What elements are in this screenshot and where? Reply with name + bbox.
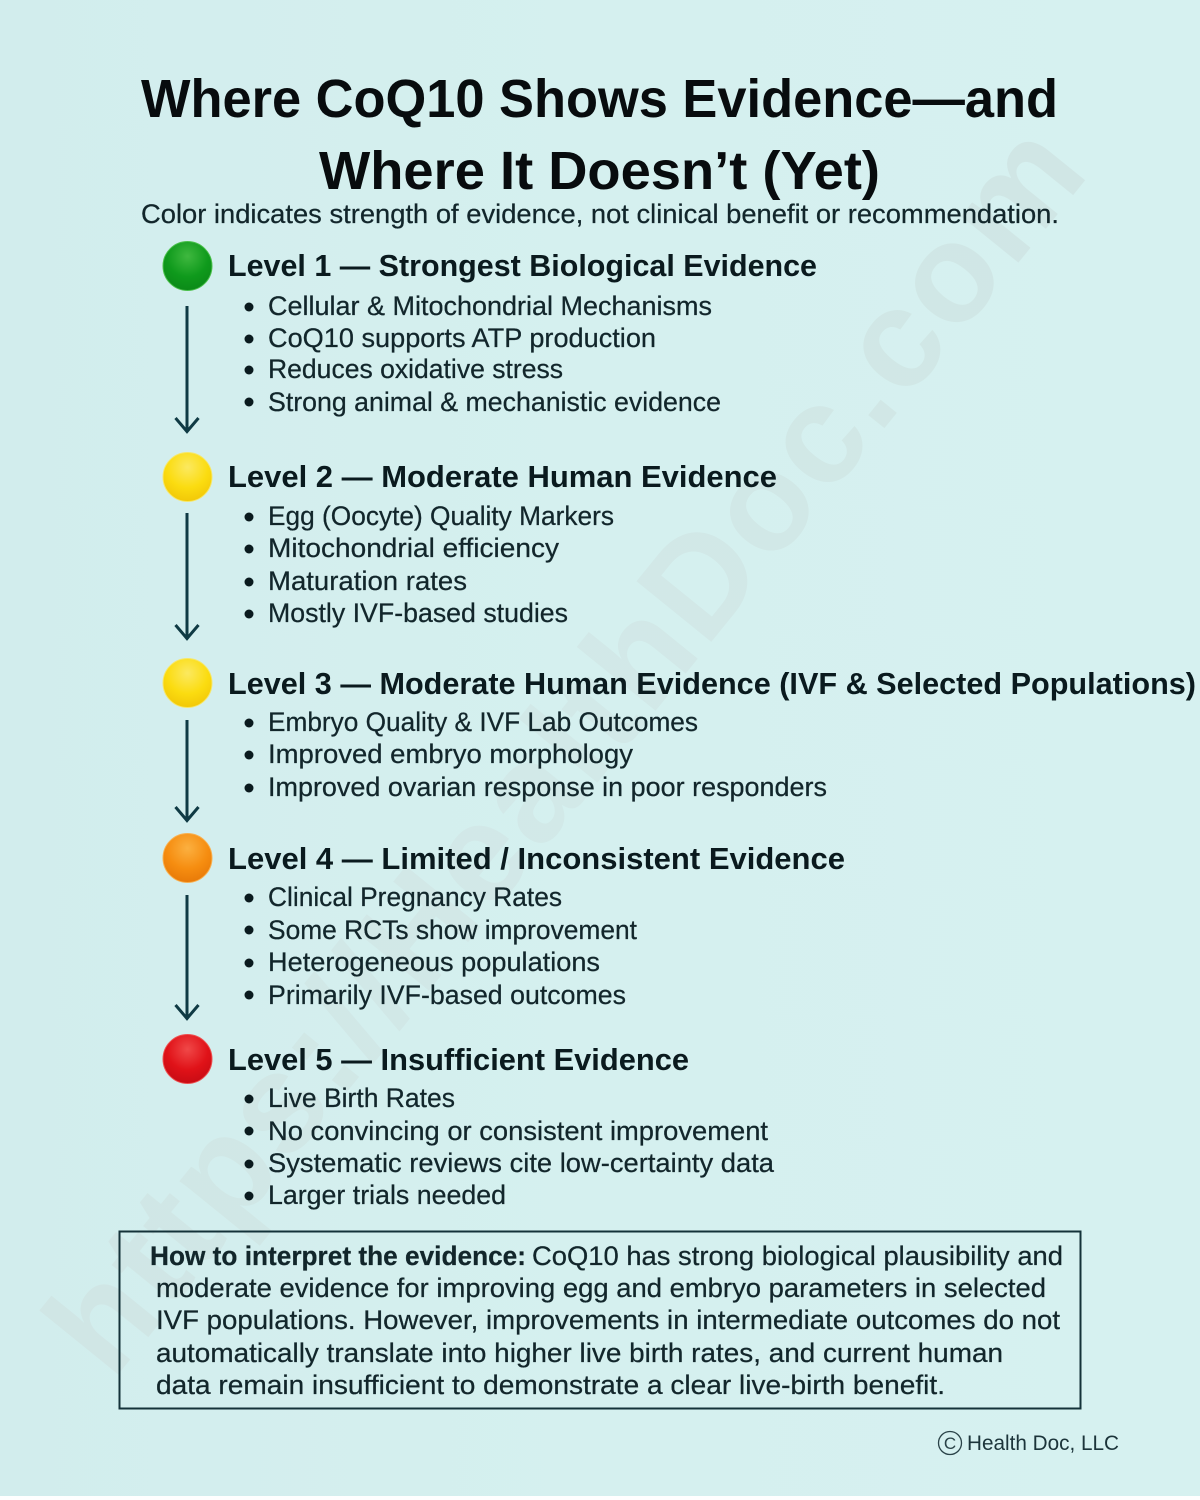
footer: copyright: Health Doc, LLC xyxy=(967,1432,1119,1455)
footer: copyright: C xyxy=(944,1434,956,1453)
title xyxy=(141,69,1058,201)
icon: orange circle xyxy=(163,834,212,882)
list: level 4: Heterogeneous populations xyxy=(268,947,600,977)
callout: how to interpret the evidence: data remain insufficient to demonstrate a clear live-birth benefit. xyxy=(156,1370,945,1400)
panel: level 1 xyxy=(163,242,817,417)
list: level 4 xyxy=(244,882,637,1010)
list: level 5 xyxy=(244,1083,775,1210)
list: level 1: Reduces oxidative stress xyxy=(268,354,563,384)
heading: level 1: Level 1 — Strongest Biological Evidence xyxy=(228,248,817,283)
list: level 5: No convincing or consistent improvement xyxy=(268,1116,768,1146)
list: level 2: Mitochondrial efficiency xyxy=(268,533,560,563)
list: level 2: Egg (Oocyte) Quality Markers xyxy=(268,501,614,531)
list: level 2: Maturation rates xyxy=(268,566,467,596)
panel: level 5 xyxy=(163,1034,775,1210)
list: level 4: Clinical Pregnancy Rates xyxy=(268,882,562,912)
heading: level 3: Level 3 — Moderate Human Evidence (IVF & Selected Populations) xyxy=(228,666,1196,701)
list: level 1: Strong animal & mechanistic evidence xyxy=(268,387,721,417)
arrow: level 1 to 2 xyxy=(176,306,198,432)
list: level 4: Some RCTs show improvement xyxy=(268,915,637,945)
callout: how to interpret the evidence xyxy=(120,1232,1080,1408)
watermark: https://HealthDoc.com xyxy=(13,94,1114,1401)
list: level 5: Larger trials needed xyxy=(268,1180,506,1210)
heading: level 5: Level 5 — Insufficient Evidence xyxy=(228,1042,689,1077)
arrow: level 4 to 5 xyxy=(176,895,198,1018)
list: level 3 xyxy=(244,707,827,802)
callout: how to interpret the evidence: automatically translate into higher live birth rates, and current human xyxy=(156,1338,1003,1368)
list: level 3: Improved ovarian response in poor responders xyxy=(268,772,827,802)
callout: how to interpret the evidence: moderate evidence for improving egg and embryo parameters in selected xyxy=(156,1273,1046,1303)
panel: level 3 xyxy=(163,658,1196,802)
icon: yellow circle xyxy=(163,452,212,502)
heading: level 4: Level 4 — Limited / Inconsistent Evidence xyxy=(228,841,845,876)
callout: how to interpret the evidence: How to interpret the evidence: xyxy=(150,1241,526,1271)
list: level 2: Mostly IVF-based studies xyxy=(268,598,568,628)
heading: level 2: Level 2 — Moderate Human Evidence xyxy=(228,459,777,494)
list: level 1: Cellular & Mitochondrial Mechanisms xyxy=(268,291,712,321)
icon: yellow circle xyxy=(163,658,212,708)
arrow: level 2 to 3 xyxy=(176,513,198,638)
list: level 5: Live Birth Rates xyxy=(268,1083,455,1113)
arrow: level 3 to 4 xyxy=(176,720,198,820)
title: Where CoQ10 Shows Evidence—and xyxy=(141,69,1058,129)
list: level 3: Embryo Quality & IVF Lab Outcomes xyxy=(268,707,698,737)
subtitle: Color indicates strength of evidence, not clinical benefit or recommendation. xyxy=(141,199,1059,229)
callout: how to interpret the evidence: CoQ10 has strong biological plausibility and xyxy=(532,1241,1063,1271)
list: level 1 xyxy=(244,291,721,417)
title: Where It Doesn’t (Yet) xyxy=(319,141,880,201)
panel: level 4 xyxy=(163,834,845,1010)
panel: level 2 xyxy=(163,452,777,628)
list: level 1: CoQ10 supports ATP production xyxy=(268,323,656,353)
list: level 3: Improved embryo morphology xyxy=(268,739,633,769)
list: level 2 xyxy=(244,501,614,628)
icon: red circle xyxy=(163,1034,212,1084)
callout: how to interpret the evidence: IVF populations. However, improvements in intermediate outcomes do not xyxy=(156,1305,1061,1335)
icon: green circle xyxy=(163,242,212,290)
list: level 5: Systematic reviews cite low-certainty data xyxy=(268,1148,775,1178)
list: level 4: Primarily IVF-based outcomes xyxy=(268,980,626,1010)
